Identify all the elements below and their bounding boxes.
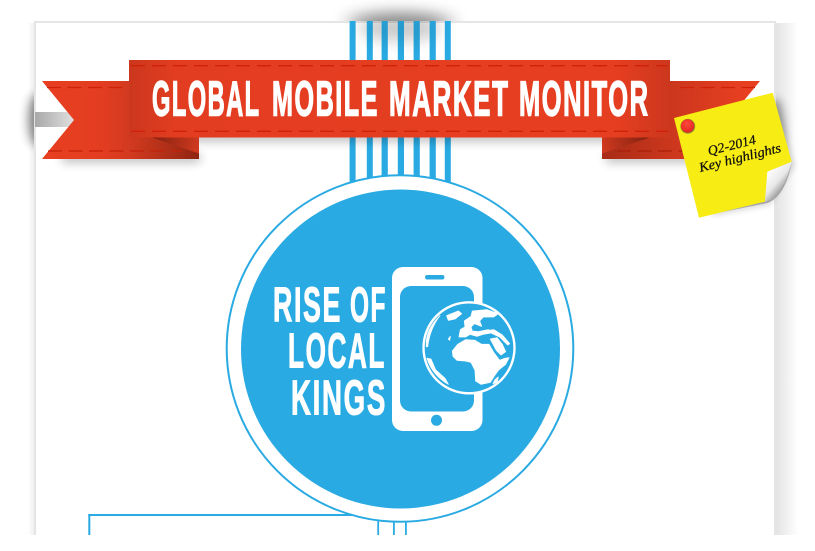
title: MARKET bbox=[389, 72, 510, 126]
note text: Key highlights bbox=[696, 140, 782, 175]
outer ring bbox=[227, 175, 573, 522]
title: MONITOR bbox=[519, 72, 650, 126]
pin bbox=[680, 119, 695, 134]
ribbon shadows bbox=[62, 133, 736, 162]
circle badge: rise of local kings: OF bbox=[350, 279, 387, 333]
title bbox=[152, 72, 650, 126]
badge heading bbox=[273, 279, 387, 426]
sticky note bbox=[674, 93, 795, 218]
bottom content frame lines bbox=[88, 505, 407, 535]
badge heading: LOCAL bbox=[288, 325, 386, 379]
right wrap shadow bbox=[767, 98, 785, 162]
inner shadow below top edge bbox=[358, 14, 442, 38]
note paper bbox=[674, 93, 792, 218]
hanging blue stripes bbox=[350, 21, 451, 191]
inner disc bbox=[241, 190, 560, 508]
icon: globe bbox=[424, 302, 514, 393]
title: GLOBAL bbox=[152, 72, 260, 126]
note shadow bbox=[690, 100, 795, 216]
ribbon right tail bbox=[602, 81, 760, 159]
title: MOBILE bbox=[272, 72, 379, 126]
badge heading: RISE bbox=[273, 279, 342, 333]
ribbon main banner bbox=[129, 60, 670, 138]
circle badge: rise of local kings bbox=[227, 175, 573, 522]
ribbon left tail bbox=[42, 81, 199, 159]
note text bbox=[693, 126, 782, 175]
icon: smartphone bbox=[392, 267, 482, 431]
outer shadow left of sheet bbox=[28, 23, 34, 535]
note text: Q2-2014 bbox=[706, 132, 757, 158]
stitching bbox=[131, 66, 668, 131]
left band wrap bbox=[35, 112, 75, 127]
top stripe shadow bbox=[344, 13, 456, 33]
outer shadow right of sheet bbox=[776, 23, 798, 535]
stripe shading near top bbox=[360, 18, 440, 42]
badge heading: KINGS bbox=[291, 372, 387, 426]
left wrap shadow bbox=[28, 94, 46, 146]
page curl bbox=[765, 162, 792, 202]
